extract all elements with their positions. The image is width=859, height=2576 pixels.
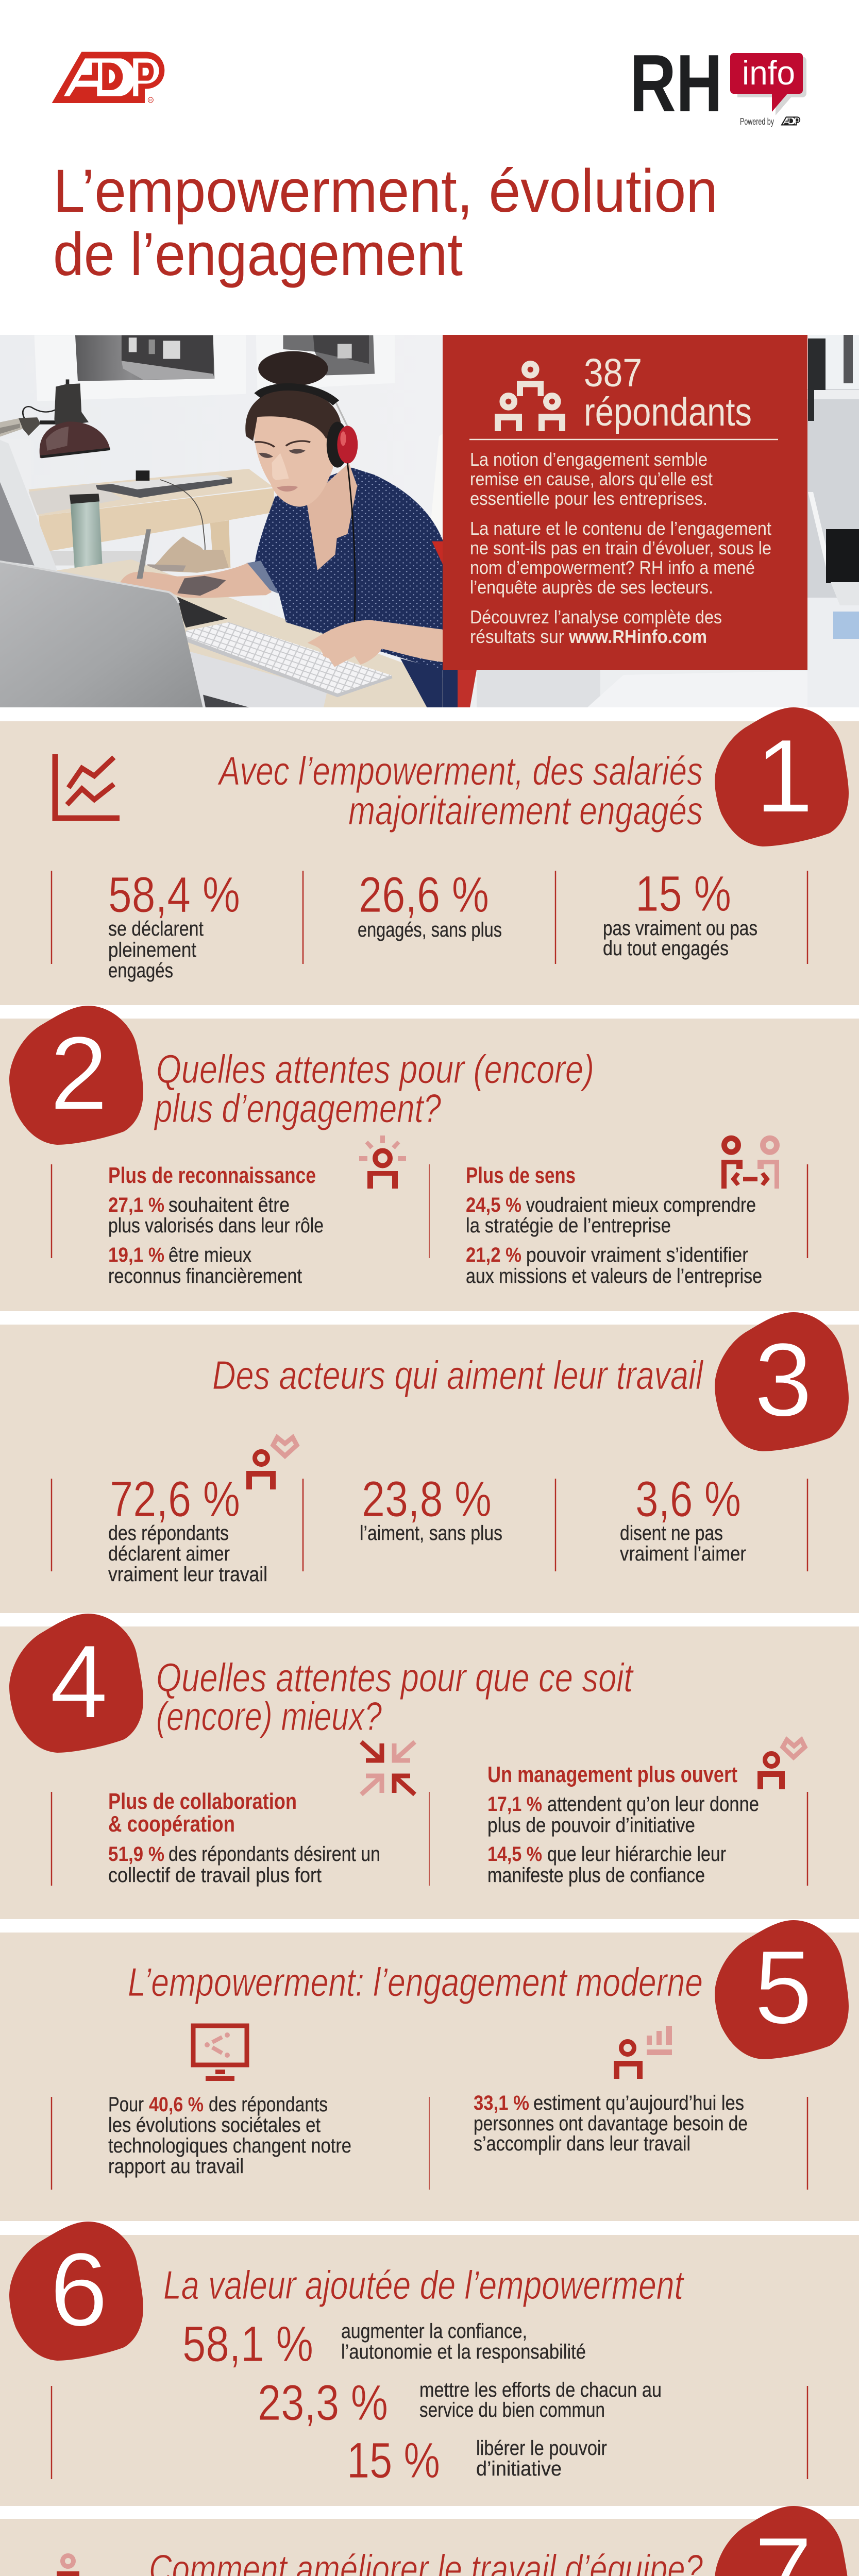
logo: ADP xyxy=(52,52,164,103)
icon: person with heart xyxy=(246,1437,297,1489)
title xyxy=(53,157,718,289)
stat: 3,6 %: disent ne pas xyxy=(620,1522,723,1545)
text: 40,6 %: Pour xyxy=(108,2093,144,2116)
icon: recognition person xyxy=(359,1136,406,1189)
RH letters: RH xyxy=(630,38,722,129)
stat: 23,3 % xyxy=(258,2375,662,2431)
stat: 58,1 %: augmenter la confiance, xyxy=(341,2320,527,2343)
heading: Avec l’empowerment, des salariés xyxy=(217,748,703,793)
number badge 7 xyxy=(715,2506,849,2576)
text: 40,6 %: rapport au travail xyxy=(108,2155,244,2178)
stat: 58,4 % xyxy=(108,867,240,982)
heading: plus d’engagement? xyxy=(154,1086,441,1131)
introduction text: La notion d’engagement semble xyxy=(470,449,708,470)
number badge 4: 4 xyxy=(50,1623,108,1740)
stat: 72,6 %: déclarent aimer xyxy=(108,1543,230,1565)
heading xyxy=(154,1046,594,1131)
stat: 3,6 %: vraiment l’aimer xyxy=(620,1543,746,1565)
logo: RH info xyxy=(630,38,806,129)
stat: 15 %: 15 % xyxy=(347,2432,440,2488)
number badge 2: 2 xyxy=(50,1015,108,1132)
heading: Quelles attentes pour que ce soit xyxy=(156,1655,634,1700)
logo: ADP: R xyxy=(149,98,152,102)
introduction text: essentielle pour les entreprises. xyxy=(470,488,708,509)
block: management: manifeste plus de confiance xyxy=(487,1864,705,1887)
block: collaboration xyxy=(108,1789,380,1887)
text: 33,1 % xyxy=(474,2092,748,2155)
block: plus de sens: Plus de sens xyxy=(466,1163,576,1188)
respondents figure: 387 xyxy=(584,351,642,395)
stat: 23,8 %: l’aiment, sans plus xyxy=(360,1522,502,1545)
block: plus de sens xyxy=(466,1163,762,1287)
speech bubble shadow xyxy=(737,57,806,115)
stat: 15 %: libérer le pouvoir xyxy=(476,2437,607,2460)
block: management xyxy=(487,1762,759,1887)
stat: 3,6 % xyxy=(620,1471,746,1565)
number badge 4 xyxy=(9,1614,143,1753)
block: plus de sens: aux missions et valeurs de l’entreprise xyxy=(466,1265,762,1287)
block: management: 14,5 % xyxy=(487,1843,542,1866)
stat: 15 %: 15 % xyxy=(635,866,731,922)
stat: 58,1 %: l’autonomie et la responsabilité xyxy=(341,2341,586,2363)
info word: info xyxy=(742,54,795,92)
title: L’empowerment, évolution xyxy=(53,157,718,225)
heading: L’empowerment: l’engagement moderne xyxy=(128,1959,703,2005)
stat: 15 %: pas vraiment ou pas xyxy=(603,917,757,940)
block: plus de reconnaissance: 27,1 % xyxy=(108,1194,164,1216)
block: management: 17,1 % xyxy=(487,1793,542,1816)
block: collaboration: des répondants désirent un xyxy=(169,1843,380,1866)
block: management: que leur hiérarchie leur xyxy=(547,1843,726,1866)
introduction text: ne sont-ils pas en train d’évoluer, sous le xyxy=(470,537,771,558)
panel: 387 répondants xyxy=(443,335,807,670)
number badge 6 xyxy=(9,2222,143,2361)
block: plus de reconnaissance: souhaitent être xyxy=(169,1194,290,1216)
block: plus de reconnaissance: 19,1 % xyxy=(108,1244,164,1266)
stat: 23,3 %: service du bien commun xyxy=(419,2399,605,2421)
stat: 58,4 %: pleinement xyxy=(108,939,196,961)
stat: 3,6 %: 3,6 % xyxy=(635,1471,741,1527)
number badge 1: 1 xyxy=(755,718,813,835)
panel 5: engagement moderne xyxy=(0,1920,859,2221)
number badge 1 xyxy=(715,707,849,846)
text: 40,6 %: des répondants xyxy=(209,2093,328,2116)
block: plus de sens: 21,2 % xyxy=(466,1244,521,1266)
icon: line chart xyxy=(55,754,120,818)
text: 33,1 %: personnes ont davantage besoin de xyxy=(474,2112,748,2135)
panel 6: valeur ajoutée xyxy=(0,2222,859,2506)
text: 40,6 %: les évolutions sociétales et xyxy=(108,2114,321,2137)
stat: 15 % xyxy=(347,2432,607,2488)
heading: Des acteurs qui aiment leur travail xyxy=(212,1352,704,1398)
block: plus de reconnaissance: Plus de reconnaissance xyxy=(108,1163,316,1188)
block: collaboration: collectif de travail plus fort xyxy=(108,1864,322,1887)
icon: monitor xyxy=(193,2026,247,2081)
respondents figure: répondants xyxy=(584,390,752,434)
stat: 58,4 %: se déclarent xyxy=(108,918,204,940)
text: 40,6 % xyxy=(108,2093,351,2178)
introduction text: remise en cause, alors qu’elle est xyxy=(470,468,713,489)
block: plus de sens: la stratégie de l’entreprise xyxy=(466,1214,671,1237)
stat: 15 %: d’initiative xyxy=(476,2458,562,2480)
icon: person with heart xyxy=(757,1740,805,1789)
block: management: plus de pouvoir d’initiative xyxy=(487,1814,695,1837)
panel 1: salariés engagés xyxy=(0,707,859,1005)
stat: 26,6 %: 26,6 % xyxy=(359,867,489,923)
number badge 6: 6 xyxy=(50,2231,108,2348)
text: 33,1 %: estiment qu’aujourd’hui les xyxy=(533,2092,744,2114)
respondents figure xyxy=(584,351,752,434)
number badge 3 xyxy=(715,1312,849,1451)
powered by: Powered by xyxy=(740,116,774,127)
stat: 72,6 %: des répondants xyxy=(108,1522,229,1545)
block: management: attendent qu’on leur donne xyxy=(547,1793,759,1816)
stat: 72,6 % xyxy=(108,1471,267,1586)
icon: group of people xyxy=(495,364,565,431)
block: plus de reconnaissance: reconnus financièrement xyxy=(108,1265,302,1287)
number badge 3: 3 xyxy=(754,1321,812,1438)
panel 7: travail d'équipe xyxy=(0,2506,859,2576)
icon: converging arrows xyxy=(361,1742,415,1794)
number badge 5 xyxy=(715,1920,849,2059)
heading xyxy=(217,748,703,833)
introduction text: Découvrez l’analyse complète des xyxy=(470,606,722,628)
icon: two people exchanging xyxy=(721,1138,779,1189)
text: 33,1 %: 33,1 % xyxy=(474,2092,529,2114)
stat: 26,6 %: engagés, sans plus xyxy=(358,919,502,941)
block: plus de reconnaissance: plus valorisés dans leur rôle xyxy=(108,1214,324,1237)
text: 40,6 %: 40,6 % xyxy=(149,2093,204,2116)
stat: 15 %: du tout engagés xyxy=(603,937,729,960)
stat: 72,6 %: 72,6 % xyxy=(110,1471,240,1527)
photo: woman working at a desk xyxy=(0,332,859,711)
block: plus de sens: pouvoir vraiment s’identifier xyxy=(526,1244,748,1266)
text: 40,6 %: technologiques changent notre xyxy=(108,2134,351,2157)
introduction text: www.RHinfo.com xyxy=(568,626,707,647)
stat: 58,1 % xyxy=(182,2316,586,2372)
introduction text: résultats sur xyxy=(470,626,564,647)
heading: La valeur ajoutée de l’empowerment xyxy=(163,2262,685,2308)
block: collaboration: & coopération xyxy=(108,1811,235,1837)
stat: 72,6 %: vraiment leur travail xyxy=(108,1563,267,1586)
panel 2: attentes pour plus d'engagement xyxy=(0,1006,859,1311)
text: 33,1 %: s’accomplir dans leur travail xyxy=(474,2132,690,2155)
heading: (encore) mieux? xyxy=(156,1693,382,1739)
block: plus de reconnaissance xyxy=(108,1163,324,1287)
speech bubble xyxy=(730,53,803,112)
stat: 23,8 %: 23,8 % xyxy=(362,1471,492,1527)
stat: 58,1 %: 58,1 % xyxy=(182,2316,313,2372)
block: management: Un management plus ouvert xyxy=(487,1762,737,1787)
heading: Quelles attentes pour (encore) xyxy=(156,1046,594,1092)
icon: team xyxy=(35,2555,102,2576)
block: plus de sens: voudraient mieux comprendre xyxy=(526,1194,756,1216)
introduction text xyxy=(470,449,771,647)
stat: 15 % xyxy=(603,866,757,960)
heading xyxy=(156,1655,634,1739)
block: plus de reconnaissance: être mieux xyxy=(169,1244,251,1266)
panel 3: acteurs qui aiment leur travail xyxy=(0,1312,859,1613)
block: collaboration: 51,9 % xyxy=(108,1843,164,1866)
number badge 5: 5 xyxy=(754,1929,812,2046)
introduction text: l’enquête auprès de ses lecteurs. xyxy=(470,577,713,598)
introduction text: nom d’empowerment? RH info a mené xyxy=(470,557,755,578)
panel 4: attentes pour que ce soit mieux xyxy=(0,1614,859,1919)
title: de l’engagement xyxy=(53,221,463,289)
stat: 58,4 %: engagés xyxy=(108,959,173,982)
stat: 58,4 %: 58,4 % xyxy=(108,867,240,923)
block: collaboration: Plus de collaboration xyxy=(108,1789,297,1814)
stat: 23,3 %: mettre les efforts de chacun au xyxy=(419,2379,662,2401)
stat: 23,8 % xyxy=(360,1471,502,1545)
stat: 23,3 %: 23,3 % xyxy=(258,2375,388,2431)
heading: majoritairement engagés xyxy=(348,788,703,833)
icon: person with bars xyxy=(614,2026,672,2079)
introduction text: La nature et le contenu de l’engagement xyxy=(470,518,771,539)
mini ADP mark xyxy=(781,116,800,126)
number badge 2 xyxy=(9,1006,143,1145)
block: plus de sens: 24,5 % xyxy=(466,1194,521,1216)
